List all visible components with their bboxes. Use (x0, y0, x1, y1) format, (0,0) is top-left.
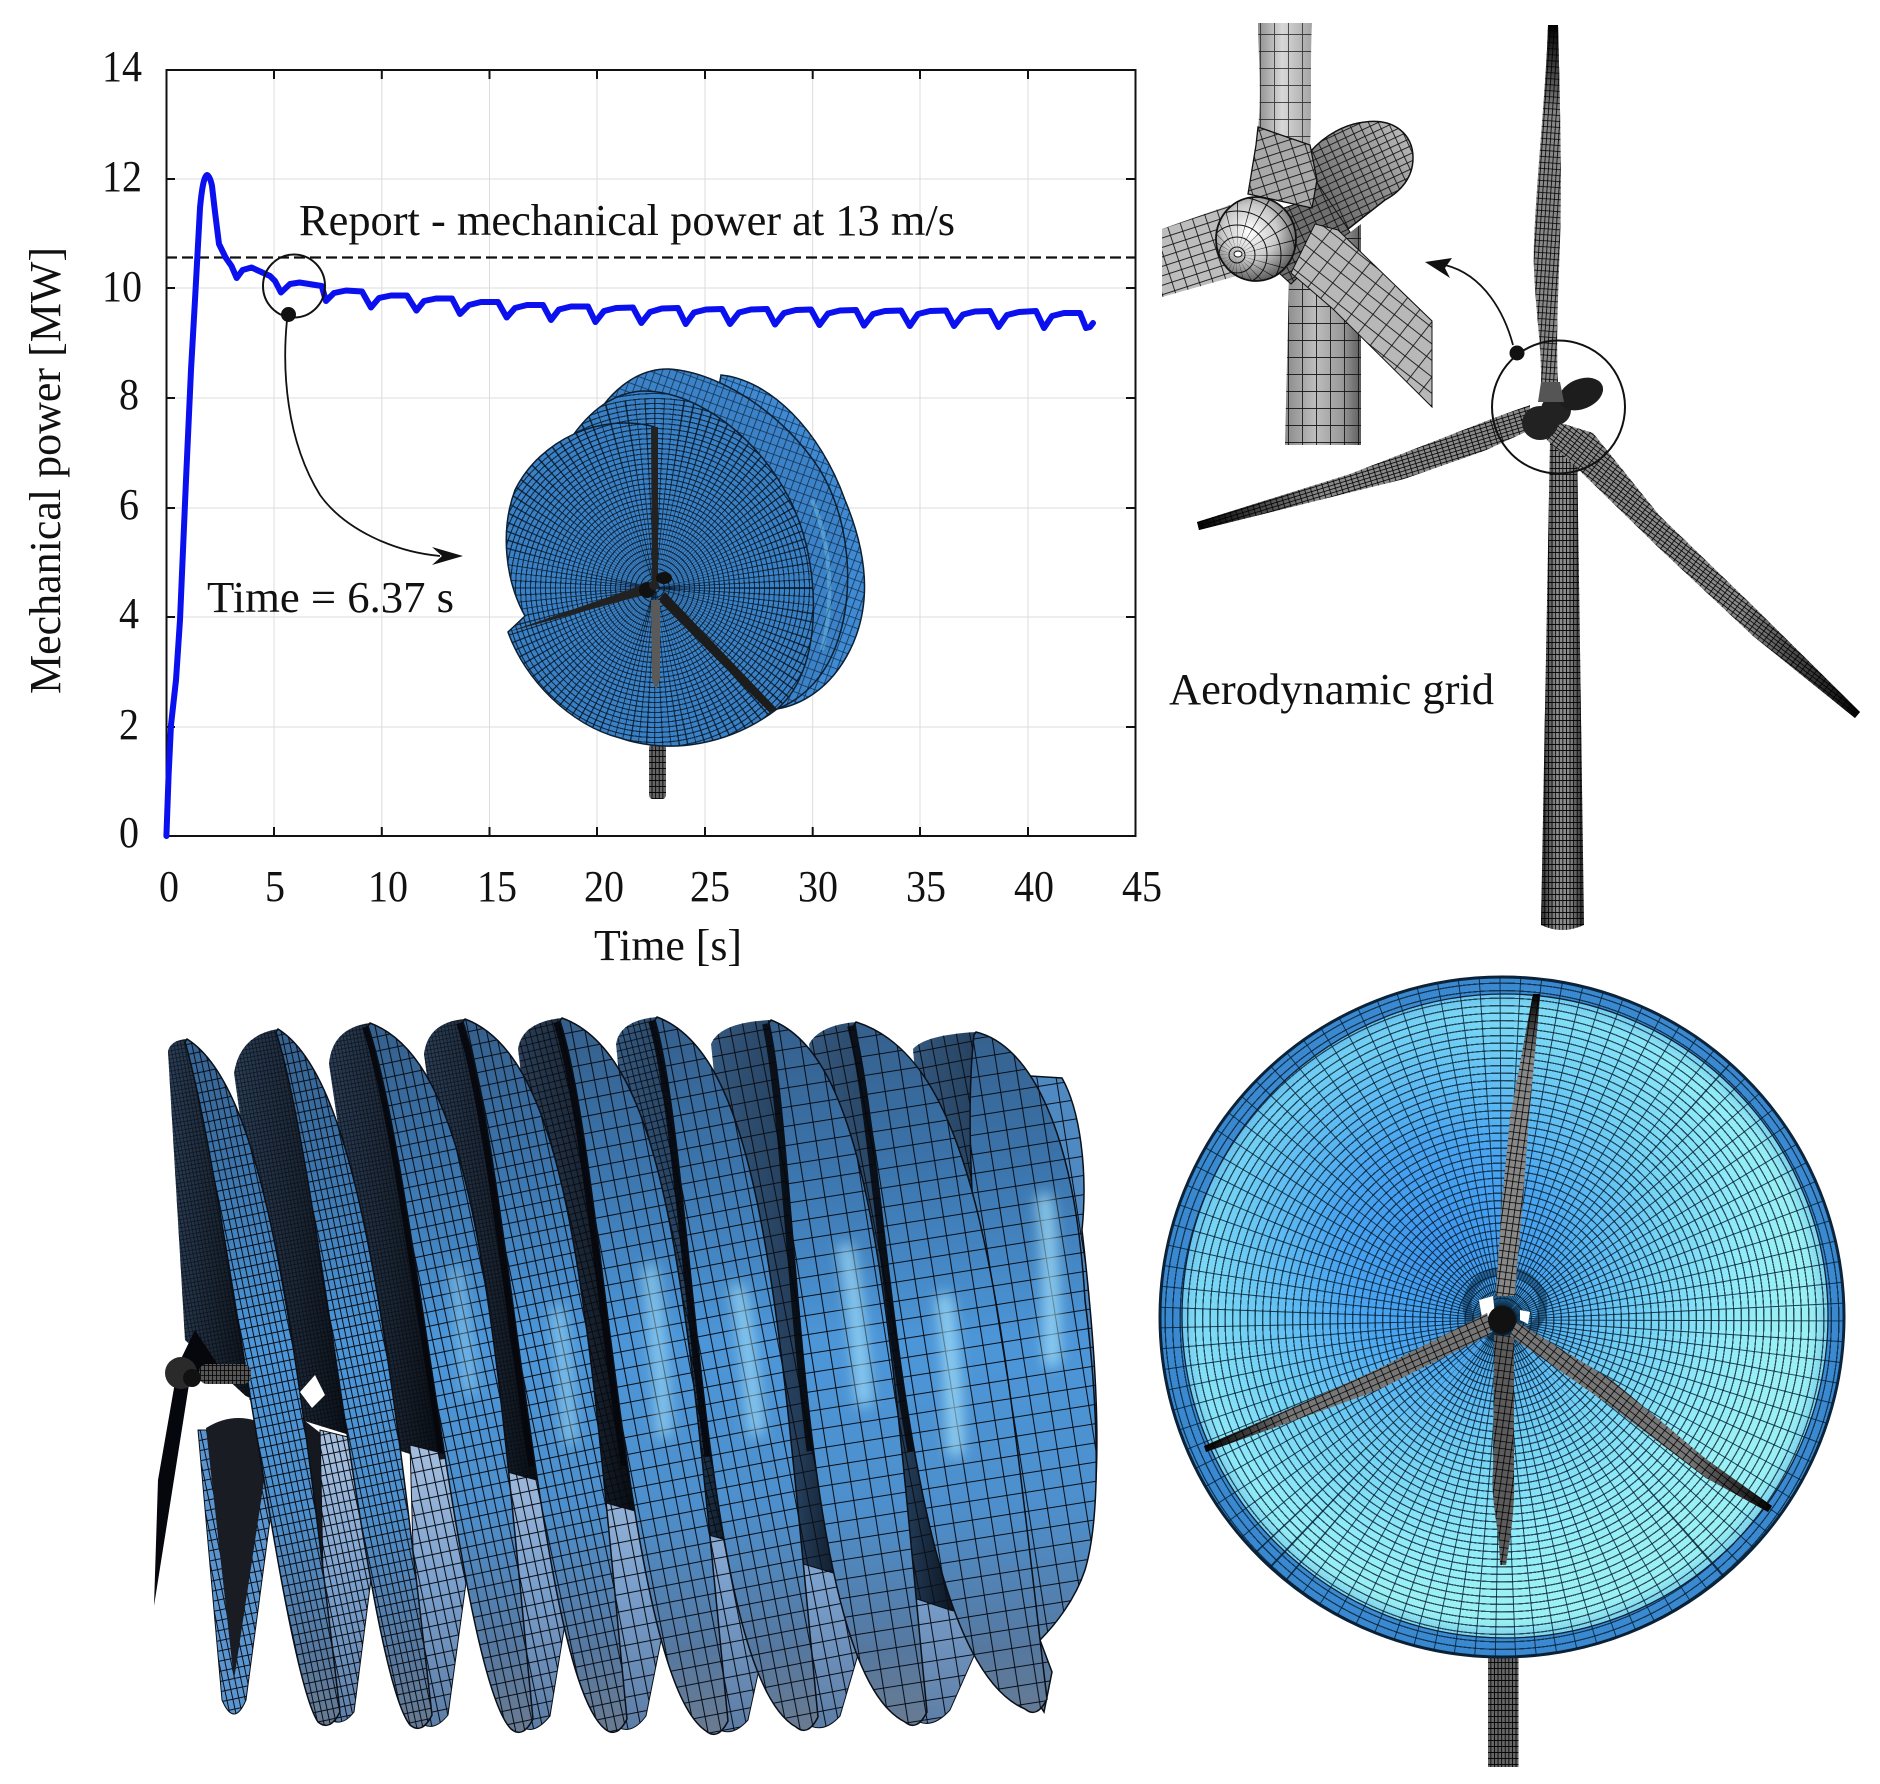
callout time label: Time = 6.37 s (207, 573, 454, 622)
wake coil 6 (616, 1017, 818, 1732)
x axis tick labels: 30 (798, 862, 838, 911)
panel caption: Aerodynamic grid (1169, 665, 1494, 714)
wake coil 2 (234, 1029, 432, 1728)
inset blades and hub (508, 427, 777, 713)
panel: mechanical power chart (21, 42, 1162, 970)
close-up left blade (1162, 205, 1240, 297)
disc mesh (1160, 977, 1844, 1657)
y axis tick labels: 2 (119, 700, 139, 749)
turbine hub and nacelle (1522, 371, 1608, 440)
x axis tick labels: 15 (477, 862, 517, 911)
y axis tick labels: 0 (119, 808, 139, 857)
close-up hub core (1278, 175, 1350, 284)
hub close-up detail (1162, 23, 1432, 445)
y axis tick labels: 6 (119, 480, 139, 529)
hub eddy shading (1467, 1271, 1543, 1339)
callout dot and arrow (281, 307, 463, 565)
detail circle around hub (1492, 340, 1625, 474)
wake trailing lobe (1010, 1076, 1097, 1640)
x axis tick labels: 20 (584, 862, 624, 911)
x axis tick labels: 0 (159, 862, 179, 911)
close-up spinner (1215, 196, 1297, 282)
front-view tower (1488, 1648, 1518, 1767)
x axis tick labels: 40 (1014, 862, 1054, 911)
wake coil 7 (711, 1020, 927, 1728)
panel: helical wake side view (154, 1017, 1097, 1734)
x axis tick labels: 25 (690, 862, 730, 911)
y axis tick labels: 8 (119, 370, 139, 419)
inset: wake mesh at 6.37 s (490, 369, 864, 799)
outer wake rim (1160, 977, 1844, 1657)
front-view hub (1488, 1306, 1516, 1334)
y axis tick labels: 10 (102, 262, 142, 311)
near-hub openings (1479, 1296, 1530, 1324)
reference line label: Report - mechanical power at 13 m/s (299, 196, 955, 245)
side-view turbine hub and blades (154, 1330, 251, 1606)
close-up blade collar (1248, 127, 1317, 208)
wake coil 3 (329, 1023, 533, 1732)
close-up nacelle (1310, 121, 1413, 233)
close-up upper blade (1258, 23, 1312, 148)
highlight circle on curve (263, 254, 325, 318)
wake coil 5 (518, 1018, 728, 1734)
turbine left blade (1197, 405, 1530, 530)
inset tower (649, 744, 666, 799)
panel: rotor-plane wake view (1160, 977, 1844, 1767)
inner wake sheet (1182, 994, 1828, 1638)
front-view left blade (1204, 1313, 1491, 1452)
wake coil 4 (424, 1019, 627, 1732)
wake coil 9 (913, 1032, 1096, 1712)
close-up tower (1285, 224, 1361, 445)
turbine right blade (1545, 418, 1860, 718)
x axis tick labels: 5 (265, 862, 285, 911)
panel: aerodynamic grid turbine (1162, 23, 1860, 930)
inset front spiral sheet (507, 392, 813, 746)
y axis title: Mechanical power [MW] (21, 247, 70, 694)
x axis tick labels: 35 (906, 862, 946, 911)
x axis title: Time [s] (594, 921, 742, 970)
y axis tick labels: 12 (102, 152, 142, 201)
front-view right blade (1510, 1322, 1772, 1512)
x axis tick labels: 45 (1122, 862, 1162, 911)
detail arrow (1425, 258, 1524, 360)
chart axes frame and ticks (166, 70, 1136, 836)
turbine tower (1541, 442, 1584, 930)
x axis tick labels: 10 (368, 862, 408, 911)
y axis tick labels (102, 42, 142, 857)
front-view lower blade (1492, 1335, 1514, 1565)
front-view top blade (1496, 994, 1540, 1296)
wake coil 1 (168, 1039, 340, 1725)
close-up right blade (1291, 224, 1432, 407)
rim fade (1182, 994, 1828, 1638)
y axis tick labels: 4 (119, 589, 139, 638)
x axis tick labels (159, 862, 1162, 911)
turbine upper blade (1534, 25, 1561, 382)
chart grid lines (166, 70, 1135, 836)
power curve (166, 175, 1093, 836)
reference line: report mechanical power (166, 256, 1135, 259)
y axis tick labels: 14 (102, 42, 142, 91)
wake openings near hub (204, 1375, 325, 1415)
wake coil 8 (809, 1022, 1047, 1723)
